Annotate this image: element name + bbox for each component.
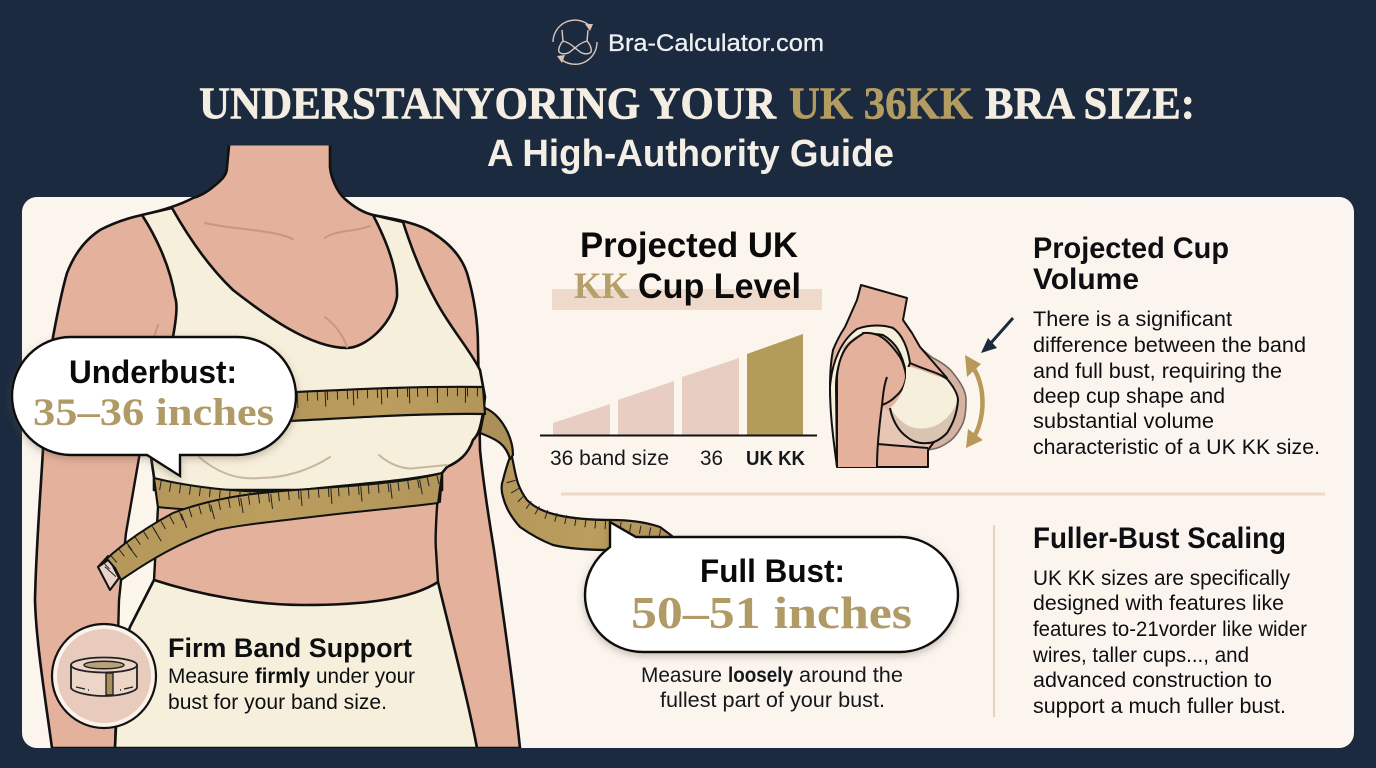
bar chart: 36 — [700, 447, 723, 470]
side-view figure — [830, 285, 966, 467]
bust curves — [199, 455, 447, 478]
bar chart: 36 band size — [550, 447, 669, 470]
tape: diagonal with tab — [98, 473, 442, 590]
callout: full bust: 50–51 inches — [631, 588, 912, 638]
title: UNDERSTANYORING YOUR — [199, 78, 777, 128]
heading: projected UK KK cup level: Projected UK — [580, 226, 798, 265]
logo: Bra-Calculator.com — [608, 30, 824, 57]
text: measure loosely: Measure — [641, 664, 722, 687]
tape: lower band — [154, 473, 442, 510]
icon: tape roll — [52, 624, 156, 728]
title: UK 36KK — [789, 78, 974, 128]
arrow: volume pointer — [981, 318, 1013, 353]
text: projected cup volume: Projected Cup — [1033, 232, 1229, 265]
text: projected cup volume: Volume — [1033, 263, 1139, 296]
subtitle: A High-Authority Guide — [487, 133, 894, 175]
tape: loop — [480, 408, 672, 552]
gap left between arm and torso — [115, 450, 158, 748]
text: measure loosely: loosely — [728, 664, 793, 687]
text: fuller-bust scaling: designed with features like — [1033, 592, 1284, 615]
text: projected cup volume: and full bust, requiring the — [1033, 360, 1282, 383]
callout: full bust: Full Bust: — [700, 553, 845, 589]
callout: underbust: Underbust: — [69, 354, 237, 390]
cream band arch — [830, 326, 910, 467]
text: fuller-bust scaling: features to-21vorder like wider — [1033, 618, 1307, 641]
text: firm band support: bust for your band size. — [168, 691, 387, 714]
text: firm band support: firmly — [255, 665, 310, 688]
text: projected cup volume: difference between the band — [1033, 334, 1306, 357]
text: fuller-bust scaling: UK KK sizes are specifically — [1033, 567, 1290, 590]
callout: full bust — [585, 522, 958, 652]
bar chart: UK KK — [746, 448, 806, 470]
text: firm band support — [168, 633, 415, 714]
cup — [890, 367, 958, 443]
arrow: curved gold double — [965, 355, 983, 448]
text: projected cup volume: There is a significant — [1033, 308, 1232, 331]
text: projected cup volume: deep cup shape and — [1033, 385, 1225, 408]
text: projected cup volume — [1033, 232, 1320, 459]
tape: bust band — [290, 387, 485, 421]
title: BRA SIZE: — [985, 78, 1195, 128]
text: firm band support: under your — [316, 665, 415, 688]
panel: main — [22, 197, 1354, 748]
body skin — [35, 135, 520, 748]
text: projected cup volume: characteristic of a UK KK size. — [1033, 436, 1320, 459]
skin creases — [154, 223, 370, 347]
text: fuller-bust scaling — [1032, 522, 1307, 718]
logo — [553, 20, 824, 64]
illustration: torso with measuring tape — [35, 135, 672, 748]
text: fuller-bust scaling: wires, taller cups..., and — [1032, 644, 1249, 667]
text: firm band support: Firm Band Support — [168, 633, 412, 663]
text: fuller-bust scaling: advanced construction to — [1033, 669, 1272, 692]
text: measure loosely: fullest part of your bust. — [660, 689, 885, 712]
outer bust volume — [915, 347, 966, 450]
text: measure loosely: around the — [799, 664, 903, 687]
heading: projected UK KK cup level: Cup Level — [638, 267, 801, 306]
heading: projected UK KK cup level: KK — [574, 266, 629, 307]
torso edge — [436, 493, 438, 582]
text: firm band support: Measure — [168, 665, 249, 688]
body — [830, 285, 947, 467]
skirt garment — [115, 580, 477, 748]
text: projected cup volume: substantial volume — [1033, 410, 1214, 433]
bar chart — [540, 334, 817, 470]
bra — [142, 208, 485, 490]
text: measure loosely — [641, 664, 903, 712]
callout: underbust: 35–36 inches — [33, 391, 274, 434]
title — [199, 78, 1195, 128]
callout: underbust — [12, 337, 296, 476]
arm — [837, 333, 906, 467]
heading: projected UK KK cup level — [552, 226, 822, 310]
text: fuller-bust scaling: support a much fuller bust. — [1033, 695, 1286, 718]
text: fuller-bust scaling: Fuller-Bust Scaling — [1033, 522, 1286, 555]
